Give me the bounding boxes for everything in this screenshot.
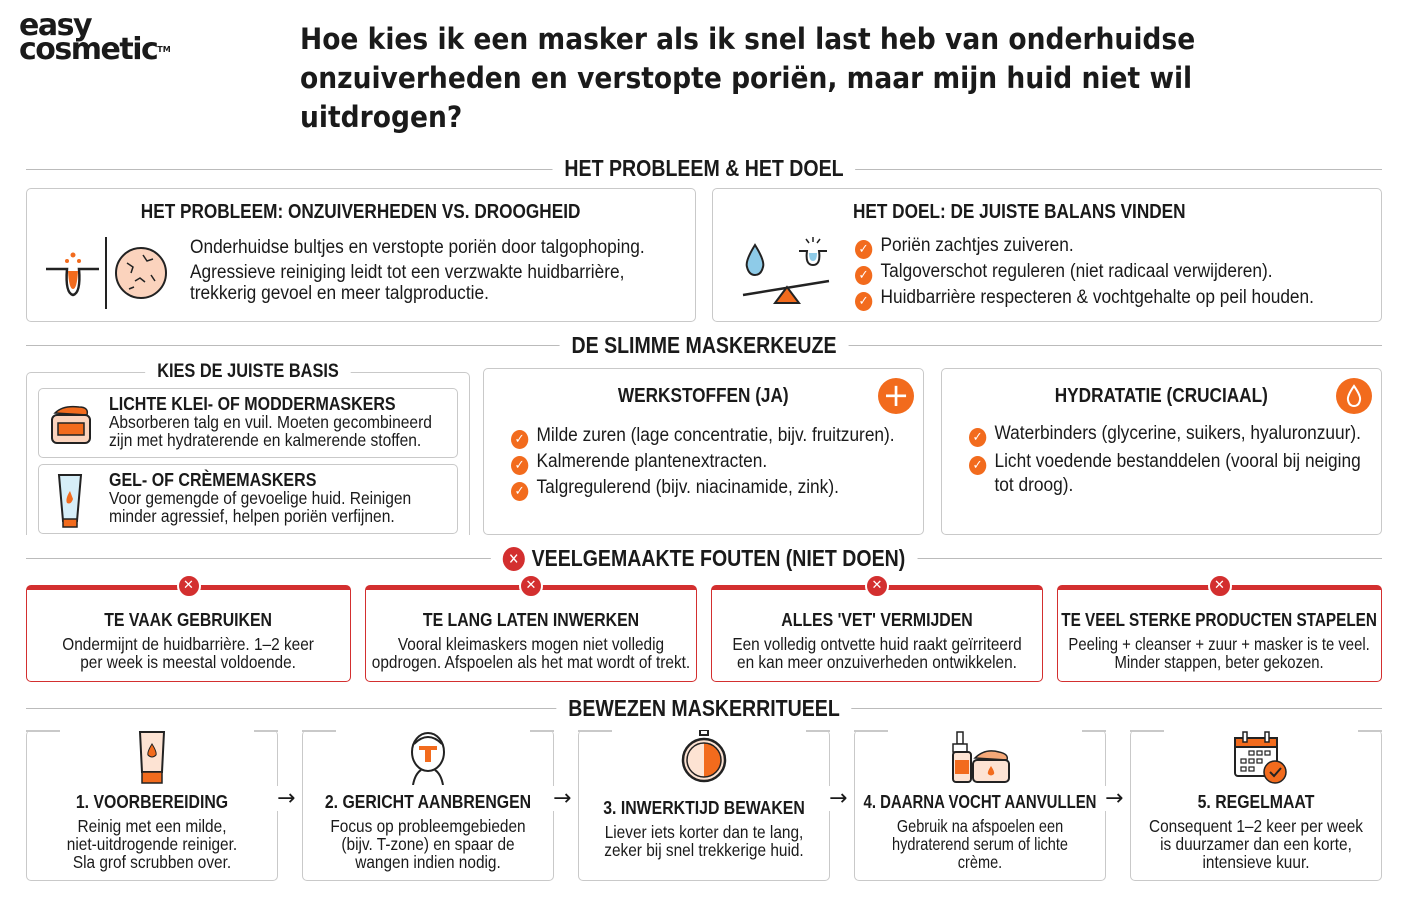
section heading: fouten: ✕ xyxy=(508,550,519,568)
step 5: is duurzamer dan een korte, xyxy=(1160,834,1352,854)
step 5: intensieve kuur. xyxy=(1202,852,1310,872)
arrow: → xyxy=(829,786,847,811)
icon: jar xyxy=(51,406,91,444)
text: probleem xyxy=(190,237,645,304)
step 2 xyxy=(302,730,554,881)
error card: te vaak: TE VAAK GEBRUIKEN xyxy=(105,610,272,630)
checklist: hydratatie xyxy=(969,423,1361,496)
step 4: Gebruik na afspoelen een xyxy=(897,816,1063,836)
arrow: → xyxy=(1105,786,1123,811)
panel: kies de juiste basis xyxy=(26,372,470,535)
checklist: werkstoffen xyxy=(511,425,895,501)
error card: te lang xyxy=(365,585,697,682)
icon: tube xyxy=(58,474,82,528)
error card: stapelen: Peeling + cleanser + zuur + masker is te veel. xyxy=(1069,634,1370,654)
checklist: hydratatie: Licht voedende bestanddelen (vooral bij neiging xyxy=(994,451,1361,472)
checklist: hydratatie: ✓ xyxy=(973,458,983,473)
panel: hydratatie xyxy=(941,368,1382,535)
error card: stapelen: Minder stappen, beter gekozen. xyxy=(1115,652,1324,672)
error card: vet: Een volledig ontvette huid raakt geïrriteerd xyxy=(732,634,1022,654)
checklist: werkstoffen: ✓ xyxy=(515,458,525,473)
error card: te vaak xyxy=(26,585,351,682)
arrow: → xyxy=(277,786,295,811)
title: Hoe kies ik een masker als ik snel last heb van onderhuidse xyxy=(300,22,1195,56)
step 3: Liever iets korter dan te lang, xyxy=(605,822,803,842)
heading: werkstoffen: WERKSTOFFEN (JA) xyxy=(618,385,789,407)
checklist: werkstoffen: ✓ xyxy=(515,432,525,447)
error card: te lang: Vooral kleimaskers mogen niet volledig xyxy=(398,634,664,654)
text: gel: GEL- OF CRÈMEMASKERS xyxy=(109,470,316,490)
heading: probleem: HET PROBLEEM: ONZUIVERHEDEN VS. DROOGHEID xyxy=(141,201,581,223)
checklist: doel: ✓ xyxy=(859,294,869,309)
error card: vet: ALLES 'VET' VERMIJDEN xyxy=(781,610,973,630)
step 1: Sla grof scrubben over. xyxy=(73,852,231,872)
section heading: maskerkeuze: DE SLIMME MASKERKEUZE xyxy=(571,332,837,358)
icon: drop xyxy=(1336,378,1372,414)
step 4: crème. xyxy=(958,852,1002,872)
text: gel xyxy=(109,470,411,526)
text: klei: LICHTE KLEI- OF MODDERMASKERS xyxy=(109,394,396,414)
checklist: doel: Huidbarrière respecteren & vochtgehalte op peil houden. xyxy=(880,287,1314,308)
card: klei xyxy=(38,388,458,458)
checklist: werkstoffen: Milde zuren (lage concentratie, bijv. fruitzuren). xyxy=(536,425,895,446)
text: gel: minder agressief, helpen poriën verfijnen. xyxy=(109,506,395,526)
panel: doel xyxy=(712,188,1382,322)
step 4: 4. DAARNA VOCHT AANVULLEN xyxy=(864,792,1096,812)
icon: plus: + xyxy=(883,376,909,414)
error card: te lang: opdrogen. Afspoelen als het mat wordt of trekt. xyxy=(372,652,690,672)
section heading: probleem & doel: HET PROBLEEM & HET DOEL xyxy=(564,155,844,181)
icon: tube xyxy=(138,731,166,784)
checklist: doel: ✓ xyxy=(859,242,869,257)
title: uitdrogen? xyxy=(300,100,462,134)
title: onzuiverheden en verstopte poriën, maar mijn huid niet wil xyxy=(300,61,1192,95)
icon: pore and dry skin xyxy=(46,237,167,309)
step 1 xyxy=(26,730,278,881)
error card: te lang: ✕ xyxy=(526,578,536,593)
checklist: hydratatie: tot droog). xyxy=(994,475,1073,496)
icon: calendar xyxy=(1234,731,1287,784)
icon: face xyxy=(411,732,445,785)
logo: cosmeticTM xyxy=(19,32,171,67)
card: gel xyxy=(38,464,458,534)
step 4 xyxy=(854,730,1106,881)
checklist: doel: Poriën zachtjes zuiveren. xyxy=(880,235,1074,256)
step 3: 3. INWERKTIJD BEWAKEN xyxy=(603,798,805,818)
step 2: Focus op probleemgebieden xyxy=(330,816,526,836)
panel: probleem xyxy=(26,188,696,322)
error card: stapelen: ✕ xyxy=(1214,578,1225,593)
error card: te lang: TE LANG LATEN INWERKEN xyxy=(423,610,639,630)
step 3 xyxy=(578,730,830,881)
text: klei: zijn met hydraterende en kalmerende stoffen. xyxy=(109,430,421,450)
text: probleem: Agressieve reiniging leidt tot een verzwakte huidbarrière, xyxy=(190,262,624,283)
icon: serum and cream xyxy=(952,731,1010,783)
icon: stopwatch xyxy=(682,730,726,782)
checklist: werkstoffen: Kalmerende plantenextracten. xyxy=(536,451,767,472)
error card: te vaak: ✕ xyxy=(183,578,194,593)
title xyxy=(300,22,1195,134)
icon: balance xyxy=(742,237,830,304)
text: probleem: Onderhuidse bultjes en verstopte poriën door talgophoping. xyxy=(190,237,645,258)
checklist: hydratatie: Waterbinders (glycerine, suikers, hyaluronzuur). xyxy=(994,423,1361,444)
step 2: wangen indien nodig. xyxy=(355,852,501,872)
step 1: Reinig met een milde, xyxy=(78,816,226,836)
arrow: → xyxy=(553,786,571,811)
step 3: zeker bij snel trekkerige huid. xyxy=(604,840,804,860)
error card: stapelen: TE VEEL STERKE PRODUCTEN STAPELEN xyxy=(1062,610,1377,630)
error card: te vaak: per week is meestal voldoende. xyxy=(81,652,296,672)
step 4: hydraterend serum of lichte xyxy=(892,834,1068,854)
checklist: doel: Talgoverschot reguleren (niet radicaal verwijderen). xyxy=(880,261,1273,282)
step 5: 5. REGELMAAT xyxy=(1198,792,1314,812)
step 5: Consequent 1–2 keer per week xyxy=(1149,816,1363,836)
text: klei: Absorberen talg en vuil. Moeten gecombineerd xyxy=(109,412,432,432)
error card: te vaak: Ondermijnt de huidbarrière. 1–2 keer xyxy=(63,634,314,654)
error card: stapelen xyxy=(1057,585,1382,682)
checklist: hydratatie: ✓ xyxy=(973,430,983,445)
error card: vet: en kan meer onzuiverheden ontwikkelen. xyxy=(737,652,1017,672)
checklist: doel: ✓ xyxy=(859,268,869,283)
text: gel: Voor gemengde of gevoelige huid. Reinigen xyxy=(109,488,411,508)
panel: werkstoffen xyxy=(483,368,924,535)
checklist: werkstoffen: ✓ xyxy=(515,484,525,499)
logo xyxy=(19,8,171,67)
step 1: 1. VOORBEREIDING xyxy=(76,792,228,812)
step 1: niet-uitdrogende reiniger. xyxy=(67,834,237,854)
heading: hydratatie: HYDRATATIE (CRUCIAAL) xyxy=(1055,385,1268,407)
step 2: (bijv. T-zone) en spaar de xyxy=(341,834,515,854)
step 2: 2. GERICHT AANBRENGEN xyxy=(325,792,531,812)
text: klei xyxy=(109,394,432,450)
text: probleem: trekkerig gevoel en meer talgproductie. xyxy=(190,283,489,304)
section heading: fouten: VEELGEMAAKTE FOUTEN (NIET DOEN) xyxy=(532,545,905,571)
heading: basis: KIES DE JUISTE BASIS xyxy=(157,361,339,382)
checklist: werkstoffen: Talgregulerend (bijv. niacinamide, zink). xyxy=(536,477,839,498)
heading: doel: HET DOEL: DE JUISTE BALANS VINDEN xyxy=(853,201,1186,223)
logo: easy xyxy=(19,8,91,43)
step 5 xyxy=(1130,730,1382,881)
checklist: doel xyxy=(855,235,1314,311)
error card: vet xyxy=(711,585,1043,682)
section heading: ritueel: BEWEZEN MASKERRITUEEL xyxy=(568,695,840,721)
error card: vet: ✕ xyxy=(872,578,882,593)
